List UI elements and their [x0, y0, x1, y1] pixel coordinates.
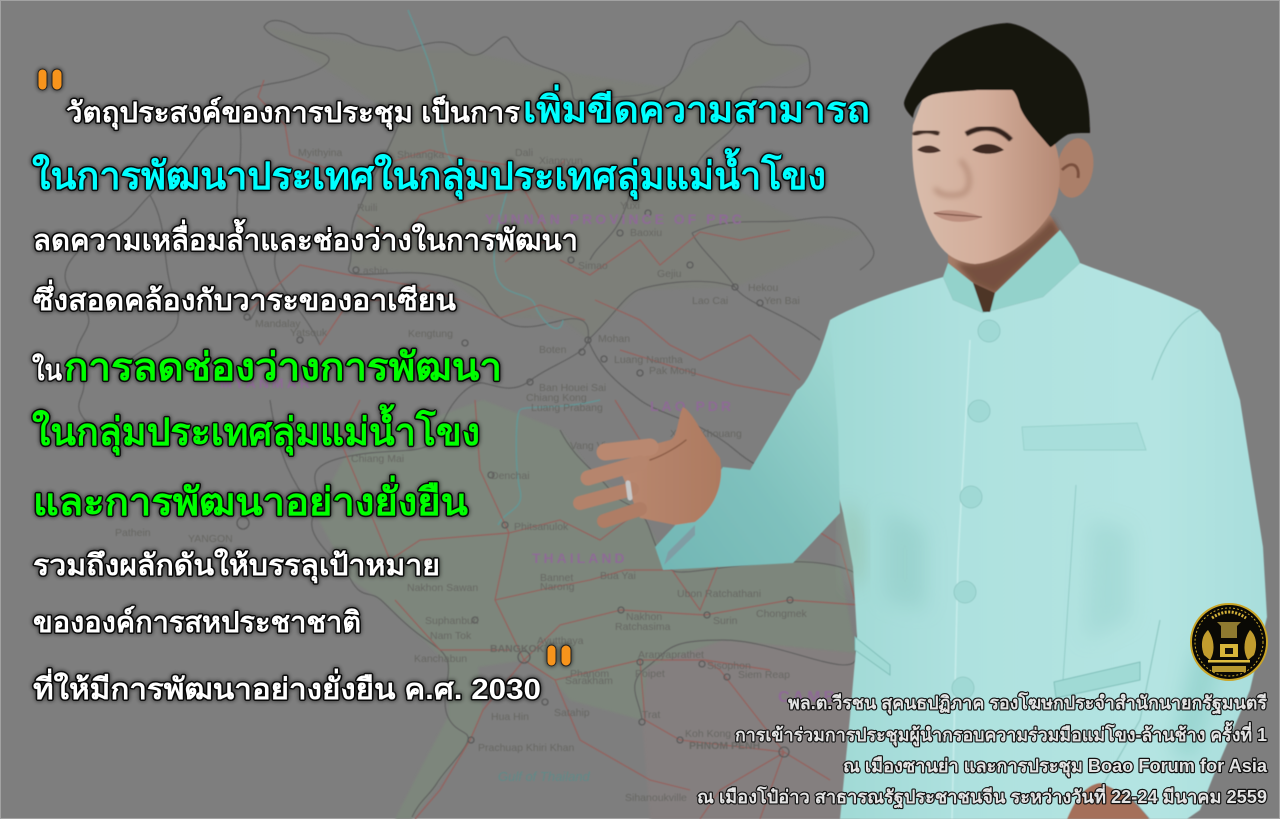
line 3: ลดความเหลื่อมล้ำและช่องว่างในการพัฒนา [33, 218, 578, 257]
face [912, 80, 1060, 264]
map labels: Luang Prabang [531, 402, 603, 414]
map rivers [408, 10, 600, 525]
map labels: Lao Cai [692, 295, 728, 307]
map labels: Trat [642, 709, 660, 721]
opening quote mark [38, 69, 62, 90]
map labels: LAO PDR [650, 398, 734, 414]
caption line 4: ณ เมืองโป๋อ่าว สาธารณรัฐประชาชนจีน ระหว่างวันที่ 22-24 มีนาคม 2559 [697, 784, 1267, 809]
line 1: เพิ่มขีดความสามารถ [523, 84, 870, 130]
neck shadow [955, 218, 1060, 294]
map roads [250, 80, 860, 819]
map labels: Ubon Ratchathani [677, 588, 761, 600]
line 1: วัตถุประสงค์ของการประชุม เป็นการ [66, 95, 520, 130]
map labels: Gejiu [657, 268, 682, 280]
lower pockets [855, 637, 1140, 698]
map labels: Chiang Kong [526, 392, 587, 404]
map labels: Lashio [357, 265, 388, 277]
hand at bottom [1067, 783, 1149, 819]
map towns [237, 210, 793, 757]
map labels: Chiang Mai [351, 453, 404, 465]
map labels: Vang Vieng [570, 440, 623, 452]
map labels: Savannakhet [798, 452, 859, 464]
map labels: Ayutthaya [537, 635, 584, 647]
map labels: Myithyina [298, 147, 343, 159]
map labels: Yatsouk [290, 327, 328, 339]
map labels: Suphanburi [425, 615, 479, 627]
map labels: Surin [713, 615, 738, 627]
jacket shading [845, 310, 1225, 819]
map labels: Chongmek [756, 608, 808, 620]
map labels: Bua Yai [600, 570, 636, 582]
map labels: Phanom [570, 668, 609, 680]
map labels: YUNNAN PROVINCE OF PRC [485, 211, 745, 227]
map labels: Ban Houei Sai [539, 382, 606, 394]
caption line 3: ณ เมืองซานย่า และการประชุม Boao Forum for Asia [843, 756, 1268, 778]
map labels: Mandalay [255, 318, 301, 330]
map labels: Nakhon Sawan [407, 582, 478, 594]
map labels: Sihanoukville [625, 792, 687, 804]
caption line 2: การเข้าร่วมการประชุมผู้นำกรอบความร่วมมือแม่โขง-ล้านช้าง ครั้งที่ 1 [735, 721, 1267, 747]
map labels: Yuxi [620, 200, 640, 212]
map labels: Pathein [115, 527, 151, 539]
map labels: Bannet [540, 572, 573, 584]
map labels: Shuangka [397, 149, 444, 161]
collar [943, 230, 1080, 313]
neck opening [973, 283, 995, 312]
closing quote mark [547, 645, 571, 666]
map labels: Sarakham [565, 675, 613, 687]
map labels: Boten [539, 344, 567, 356]
map labels: Dali [515, 147, 533, 159]
neck [948, 215, 1060, 294]
map labels [115, 147, 859, 804]
map labels: MYANMAR [220, 375, 313, 391]
line 6: ในกลุ่มประเทศลุ่มแม่น้ำโขง [32, 404, 480, 456]
jacket body and right sleeve [830, 263, 1267, 819]
map labels: Satahip [554, 707, 590, 719]
map labels: Kengtung [408, 328, 453, 340]
raised arm sleeve [655, 320, 840, 570]
map labels: Hua Hin [491, 711, 529, 723]
map regions [264, 25, 863, 819]
map labels: Baoxiu [630, 227, 662, 239]
map labels: Simao [578, 260, 608, 272]
map labels: Nam Tok [430, 630, 472, 642]
map labels: Yen Bai [764, 295, 800, 307]
hair [904, 23, 1090, 147]
line 5: การลดช่องว่างการพัฒนา [64, 347, 502, 389]
line 9: ขององค์การสหประชาชาติ [33, 605, 361, 639]
line 4: ซึ่งสอดคล้องกับวาระของอาเซียน [33, 279, 456, 317]
map labels: BANGKOK [490, 643, 545, 655]
line 8: รวมถึงผลักดันให้บรรลุเป้าหมาย [33, 548, 440, 583]
ear [1052, 135, 1098, 201]
map labels: Xieng Khouang [670, 428, 742, 440]
map labels: Hekou [748, 282, 779, 294]
map labels: Poipet [635, 668, 665, 680]
map labels: Xiangyun [539, 155, 583, 167]
map labels: Siem Reap [738, 669, 790, 681]
caption line 1: พล.ต.วีรชน สุคนธปฏิภาค รองโฆษกประจำสำนักนายกรัฐมนตรี [788, 692, 1267, 715]
person: government spokesman in teal jacket [580, 23, 1267, 819]
map labels: Ratchasima [615, 621, 671, 633]
map labels: Pakkad [782, 443, 817, 455]
map labels: CAMB [778, 689, 838, 706]
caption [697, 692, 1268, 809]
map borders [65, 21, 874, 817]
chest pocket [1022, 423, 1146, 450]
map labels: Mohan [598, 333, 630, 345]
map of the Mekong region [65, 10, 874, 819]
map labels: Pak Mong [649, 365, 696, 377]
line 5: ใน [32, 353, 62, 387]
hand with ring [580, 407, 721, 525]
cuff lining [664, 525, 695, 565]
buttons [952, 320, 1000, 699]
map labels: YANGON [188, 533, 233, 545]
map labels: Aranyaprathet [638, 649, 704, 661]
line 7: และการพัฒนาอย่างยั่งยืน [33, 475, 468, 524]
map labels: Nakhon [626, 611, 662, 623]
line 10: ที่ให้มีการพัฒนาอย่างยั่งยืน ค.ศ. 2030 [33, 668, 541, 706]
map labels: Kanchabun [414, 653, 467, 665]
quote text block [32, 69, 870, 706]
map labels: Denchai [491, 470, 530, 482]
ring [628, 483, 630, 498]
map labels: Narong [540, 581, 575, 593]
map labels: THAILAND [532, 550, 628, 566]
map labels: Koh Kong [685, 728, 731, 740]
line 2: ในการพัฒนาประเทศในกลุ่มประเทศลุ่มแม่น้ำโขง [32, 148, 826, 200]
seal of the Prime Minister's Office [1191, 604, 1267, 680]
map labels: Sisophon [707, 660, 751, 672]
line 1 [66, 84, 870, 130]
map labels: PHNOM PENH [689, 740, 760, 752]
map labels: Gulf of Thailand [498, 769, 591, 784]
map labels: Luang Namtha [614, 354, 683, 366]
map labels: Prachuap Khiri Khan [478, 742, 574, 754]
map labels: Ruili [357, 202, 377, 214]
map labels: Phitsanulok [514, 521, 569, 533]
facial features [913, 128, 1078, 222]
